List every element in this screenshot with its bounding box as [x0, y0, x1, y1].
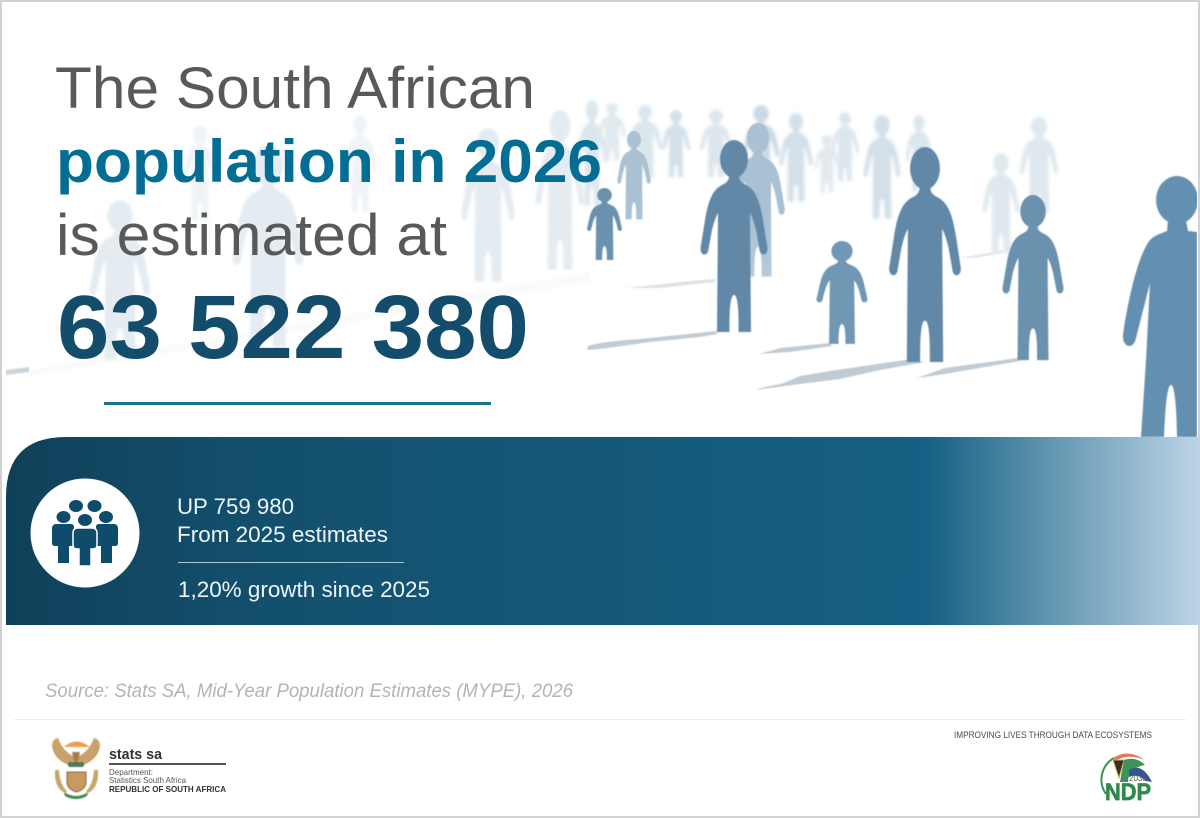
logo: NDP 2030: 2030 [1129, 774, 1147, 783]
faint ground band [30, 272, 590, 376]
logo: NDP 2030 [1101, 753, 1152, 806]
logo: stats sa wordmark: Statistics South Africa [109, 775, 186, 785]
faint figures behind the title [89, 110, 584, 359]
accent rule [104, 402, 491, 405]
title last line: is estimated at [56, 203, 447, 268]
logo: stats sa wordmark: stats sa [109, 746, 163, 763]
logo: NDP 2030: NDP [1105, 779, 1151, 806]
source note: Source: Stats SA, Mid-Year Population Estimates (MYPE), 2026 [45, 681, 573, 702]
ground shadows [6, 250, 1020, 390]
logo: stats sa coat of arms [52, 738, 100, 799]
photo: crowd of paper figures [6, 100, 1198, 437]
tagline: IMPROVING LIVES THROUGH DATA ECOSYSTEMS [954, 730, 1152, 740]
logo: stats sa wordmark: REPUBLIC OF SOUTH AFRICA [109, 784, 226, 794]
headline number: 63 522 380 [57, 278, 529, 378]
text: growth rate: 1,20% growth since 2025 [178, 577, 430, 602]
logo: stats sa wordmark [109, 746, 226, 794]
title highlight: population in 2026 [56, 128, 602, 195]
icon: group of people [30, 478, 140, 588]
statistics band [6, 437, 1200, 625]
logo: stats sa wordmark: Department: [109, 767, 153, 777]
text: increase: UP 759 980 [177, 494, 294, 519]
title: The South African [55, 56, 535, 121]
text: comparison: From 2025 estimates [177, 522, 388, 547]
foreground figures [587, 140, 1198, 437]
far background figures [577, 100, 1058, 253]
large cropped figure [1123, 176, 1198, 437]
mid figures [617, 123, 785, 277]
title [55, 56, 602, 268]
